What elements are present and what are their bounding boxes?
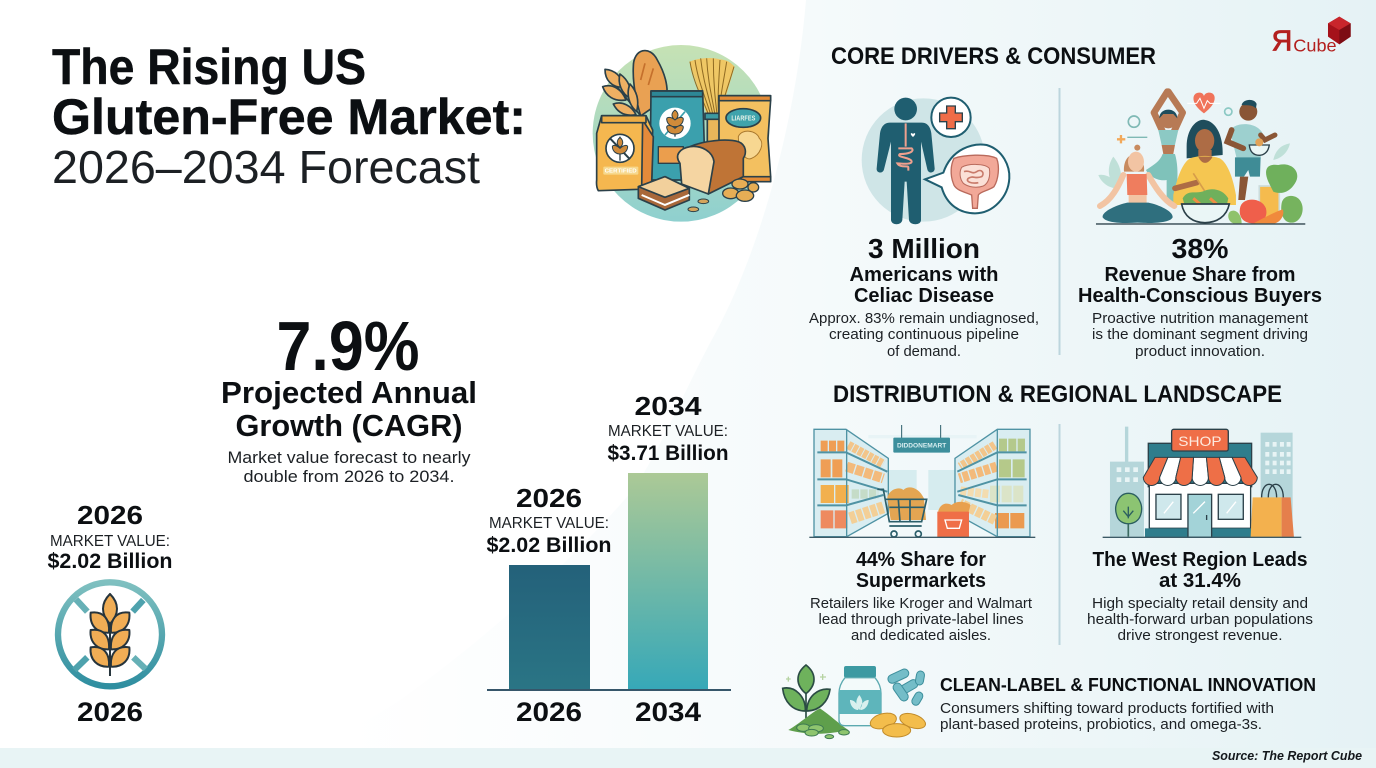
- logo: RCube: [1272, 17, 1351, 58]
- bar chart: market value: [486, 391, 731, 727]
- panel: celiac disease text: creating continuous pipeline: [829, 326, 1019, 343]
- panel: supermarkets text: and dedicated aisles.: [851, 627, 991, 644]
- panel: celiac disease text: 3 Million: [868, 233, 980, 264]
- panel: CAGR callout: 7.9%: [276, 307, 420, 385]
- panel: CAGR callout: Market value forecast to nearly: [228, 448, 471, 467]
- panel: west region text: at 31.4%: [1159, 570, 1241, 592]
- icon: shop storefront: [1103, 427, 1301, 538]
- panel: health-conscious buyers text: product innovation.: [1135, 343, 1265, 360]
- panel: clean-label innovation text: plant-based proteins, probiotics, and omega-3s.: [940, 716, 1262, 733]
- panel: celiac disease text: Americans with: [850, 263, 998, 286]
- label: 2026 value: 2026: [516, 483, 582, 513]
- panel: clean-label innovation text: CLEAN-LABEL & FUNCTIONAL INNOVATION: [940, 675, 1316, 695]
- panel: 2026 market value left: 2026: [77, 500, 143, 530]
- divider: [1058, 424, 1060, 645]
- chart axis: [487, 689, 731, 691]
- panel: health-conscious buyers text: [1078, 233, 1322, 360]
- panel: clean-label innovation text: [940, 675, 1316, 733]
- label: 2026 value: [486, 483, 612, 557]
- title: The Rising US: [52, 39, 366, 95]
- icon: person with digestive system: [862, 98, 1009, 224]
- bar: 2026: [509, 565, 590, 690]
- panel: supermarkets text: Retailers like Kroger and Walmart: [810, 595, 1033, 612]
- panel: supermarkets text: Supermarkets: [856, 570, 986, 592]
- icon: gluten-free food group: LIARFES: [731, 114, 755, 123]
- panel: CAGR callout: Projected Annual: [221, 375, 477, 410]
- panel: CAGR callout: double from 2026 to 2034.: [244, 467, 454, 486]
- panel: west region text: [1087, 549, 1313, 644]
- icon: supermarket aisle: DIDDONEMART: [897, 443, 946, 450]
- title: Gluten-Free Market:: [52, 89, 526, 145]
- title: [52, 39, 526, 193]
- axis labels: 2034: [635, 697, 701, 727]
- icon: plant, supplement bottle, capsules: [783, 665, 927, 739]
- label: 2034 value: 2034: [634, 391, 702, 421]
- title: 2026–2034 Forecast: [52, 141, 480, 193]
- standing man: [1227, 100, 1275, 200]
- label: 2026 under wheat icon: 2026: [77, 697, 143, 727]
- icon: gluten-free food group: [593, 45, 771, 222]
- label: 2026 value: $2.02 Billion: [486, 534, 612, 557]
- icon: crossed-out wheat: [58, 582, 162, 686]
- bar: 2034: [628, 473, 708, 690]
- panel: health-conscious buyers text: 38%: [1172, 233, 1229, 264]
- divider: [1058, 88, 1060, 355]
- panel: CAGR callout: Growth (CAGR): [236, 408, 462, 443]
- panel: celiac disease text: of demand.: [887, 343, 961, 360]
- yoga standing figure: [1146, 92, 1183, 203]
- panel: west region text: High specialty retail density and: [1092, 595, 1308, 612]
- label: 2026 value: MARKET VALUE:: [489, 515, 609, 532]
- axis labels: 2026: [516, 697, 582, 727]
- logo: RCube: Cube: [1293, 35, 1337, 55]
- panel: clean-label innovation text: Consumers shifting toward products fortified with: [940, 700, 1274, 717]
- panel: CAGR callout: [221, 307, 477, 486]
- panel: supermarkets text: lead through private-label lines: [818, 611, 1024, 628]
- salad bowl and produce: [1096, 164, 1305, 225]
- panel: west region text: health-forward urban populations: [1087, 611, 1313, 628]
- logo: RCube: Я: [1272, 26, 1292, 58]
- icon: gluten-free food group: CERTIFIED: [605, 169, 637, 175]
- source note: Source: The Report Cube: [1212, 748, 1362, 763]
- icon: health-conscious people: [1096, 92, 1305, 225]
- heading: core drivers: CORE DRIVERS & CONSUMER: [831, 43, 1156, 70]
- panel: 2026 market value left: MARKET VALUE:: [50, 533, 170, 550]
- panel: 2026 market value left: [48, 500, 172, 573]
- panel: west region text: The West Region Leads: [1092, 549, 1308, 571]
- heart and small icons: [1117, 93, 1232, 143]
- label: 2034 value: MARKET VALUE:: [608, 423, 728, 440]
- panel: supermarkets text: 44% Share for: [856, 549, 986, 571]
- panel: health-conscious buyers text: Health-Conscious Buyers: [1078, 284, 1322, 307]
- label: 2034 value: $3.71 Billion: [608, 442, 728, 465]
- panel: health-conscious buyers text: is the dominant segment driving: [1092, 326, 1308, 343]
- axis labels: [516, 697, 701, 727]
- panel: supermarkets text: [810, 549, 1033, 644]
- panel: health-conscious buyers text: Proactive nutrition management: [1092, 310, 1309, 327]
- icon: shop storefront: SHOP: [1178, 433, 1222, 449]
- panel: celiac disease text: [809, 233, 1039, 360]
- heading: distribution: DISTRIBUTION & REGIONAL LANDSCAPE: [833, 381, 1282, 408]
- panel: 2026 market value left: $2.02 Billion: [48, 550, 172, 573]
- woman meditating: [1100, 145, 1174, 223]
- label: 2034 value: [608, 391, 728, 465]
- woman with salad: [1173, 120, 1236, 205]
- icon: supermarket aisle: [809, 425, 1035, 538]
- panel: health-conscious buyers text: Revenue Share from: [1104, 263, 1296, 286]
- panel: west region text: drive strongest revenue.: [1118, 627, 1282, 644]
- panel: celiac disease text: Celiac Disease: [854, 284, 994, 307]
- panel: celiac disease text: Approx. 83% remain undiagnosed,: [809, 310, 1039, 327]
